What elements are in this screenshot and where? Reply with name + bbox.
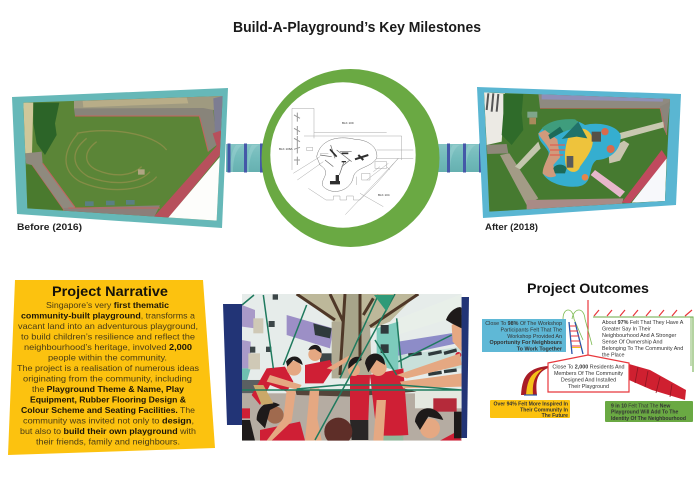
- text: sense of ownership: Belonging To The Community And: [602, 346, 683, 352]
- narrative text: but also to build their own playground with: [20, 427, 196, 436]
- narrative text: people within the community.: [48, 354, 167, 362]
- narrative text: Singapore’s very first thematic: [46, 301, 169, 310]
- narrative text: [17, 301, 199, 446]
- box: residents centre house: Designed And Installed: [561, 378, 616, 384]
- narrative text: community was invited not only to design ,: [23, 416, 194, 426]
- box: inspired outcome: [490, 400, 570, 419]
- diagram: project outcomes playground: [482, 300, 693, 422]
- children in red shirts: [242, 352, 462, 441]
- title: Build-A-Playground’s Key Milestones: [233, 20, 481, 36]
- yellow slide left: [521, 366, 548, 395]
- building right: [373, 294, 462, 374]
- box: inspired outcome: Over 94% Felt More Inspired In: [494, 402, 568, 408]
- box: residents centre house: Members Of The Community: [554, 371, 623, 377]
- connector tube: left: [226, 144, 263, 172]
- box: residents centre house: Close To 2,000 Residents And: [552, 364, 625, 370]
- milestone ring: design plan: BLK 108A: [279, 147, 293, 151]
- heading: Project Narrative: [52, 283, 168, 299]
- aerial photo: finished playground: [484, 92, 670, 212]
- box: workshop outcome: Participants Felt That The: [500, 328, 562, 334]
- narrative text: community-built playground , transforms a: [21, 312, 195, 320]
- narrative text: Equipment, Rubber Flooring Design &: [30, 396, 186, 404]
- milestone ring: design plan: BLK 104: [378, 193, 390, 197]
- aerial photo: empty grass field: [20, 93, 227, 223]
- heading: project outcomes: Project Outcomes: [527, 280, 649, 296]
- photo backing shapes: [223, 297, 469, 438]
- box: inspired outcome: The Future: [542, 413, 568, 419]
- narrative text: to build children’s resilience and reflect the: [21, 332, 195, 342]
- text: sense of ownership: About 97% Felt That They Have A: [602, 320, 684, 326]
- box: workshop outcome: [482, 319, 566, 352]
- text: sense of ownership: Neighbourhood And A Stronger: [602, 333, 677, 339]
- panel: after photo frame: [477, 87, 681, 218]
- box: identity outcome: Identity Of The Neighbourhood: [611, 416, 686, 422]
- building left: [242, 294, 333, 380]
- text: sense of ownership: [602, 320, 684, 358]
- box: identity outcome: [605, 401, 693, 422]
- milestone ring: design plan: BLK 109: [342, 121, 354, 125]
- narrative text: Colour Scheme and Seating Facilities. The: [21, 406, 195, 415]
- text: sense of ownership: Greater Say In Their: [602, 326, 651, 332]
- green roof frame with red ticks: [593, 310, 693, 372]
- box: residents centre house: [548, 355, 629, 392]
- box: workshop outcome: To Work Together: [517, 346, 563, 352]
- narrative text: the Playground Theme & Name, Play: [32, 385, 184, 394]
- text: sense of ownership: Sense Of Ownership And: [602, 340, 663, 346]
- box: workshop outcome: Close To 98% Of The Workshop: [485, 321, 562, 327]
- text: sense of ownership: the Place: [602, 352, 624, 358]
- narrative text: originating from the community, including: [23, 374, 193, 384]
- label: before: Before (2016): [17, 222, 82, 233]
- box: identity outcome: Playground Will Add To The: [611, 410, 678, 416]
- red centre post: [587, 300, 589, 356]
- narrative text: neighbourhood’s heritage, involved 2,000: [24, 343, 192, 352]
- narrative text: vacant land into an adventurous playground,: [18, 322, 198, 331]
- narrative text: their friends, family and neighbours.: [36, 438, 180, 446]
- box: identity outcome: 9 in 10 Felt That The New: [611, 404, 670, 410]
- box: workshop outcome: Opportunity For Neighbours: [490, 340, 562, 346]
- ladder: [563, 310, 592, 354]
- red slide right: [629, 364, 686, 400]
- label: after: After (2018): [485, 222, 538, 233]
- box: residents centre house: Their Playground: [568, 384, 609, 390]
- site plan drawing: [292, 108, 413, 215]
- panel: before photo frame: [12, 88, 228, 228]
- panel: project narrative: [8, 280, 215, 455]
- narrative text: The project is a realisation of numerous ideas: [17, 364, 199, 373]
- photo: children building playground: [242, 294, 462, 446]
- connector tube: right: [438, 144, 484, 172]
- canopy and columns: [297, 294, 417, 328]
- box: workshop outcome: Workshop Provided An: [507, 334, 562, 340]
- box: inspired outcome: Their Community In: [520, 408, 568, 414]
- milestone ring: design plan: [262, 69, 440, 247]
